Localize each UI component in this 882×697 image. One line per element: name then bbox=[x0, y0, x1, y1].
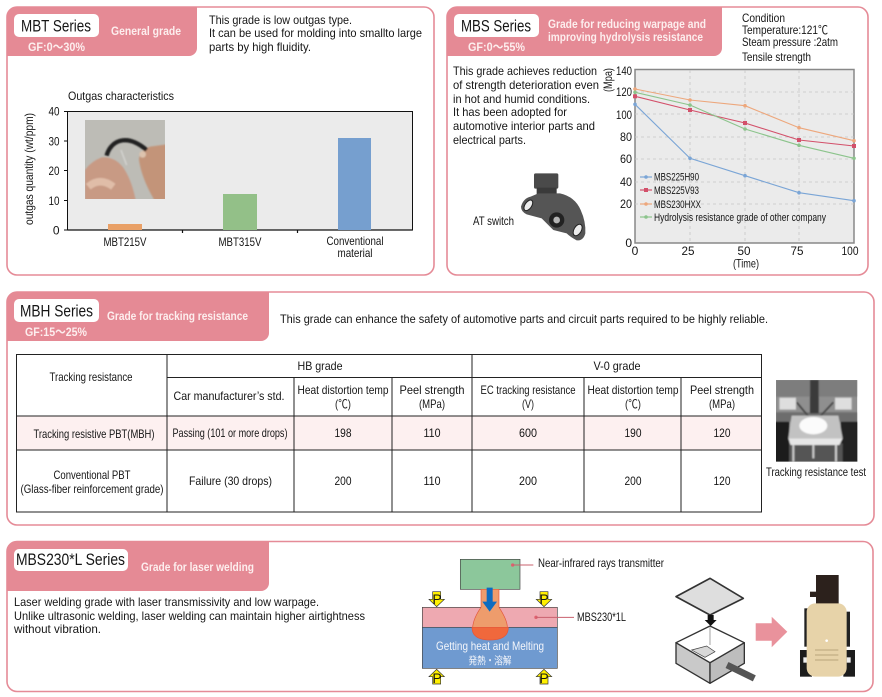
line chart: tensile strength: 0 bbox=[632, 244, 639, 258]
header: MBT Series: General grade bbox=[111, 24, 181, 38]
header: MBS Series: MBS Series bbox=[461, 18, 531, 36]
line chart: tensile strength: (Mpa) bbox=[601, 68, 615, 92]
diagram: laser welding: Getting heat and Melting bbox=[436, 639, 544, 653]
bar chart: outgas quantity: outgas quantity (wt/ppm) bbox=[22, 113, 36, 225]
table: tracking resistance comparison: 120 bbox=[714, 426, 731, 440]
line chart: tensile strength: 100 bbox=[842, 244, 859, 258]
table: tracking resistance comparison: 198 bbox=[334, 426, 352, 440]
text: MBS description bbox=[453, 64, 599, 147]
table: tracking resistance comparison bbox=[16, 354, 762, 512]
photo: tracking resistance test bbox=[773, 380, 859, 463]
table: tracking resistance comparison: 200 bbox=[519, 474, 537, 488]
bar chart: outgas quantity bbox=[22, 104, 412, 260]
label: AT switch: AT switch bbox=[473, 214, 514, 228]
text: MBT description: This grade is low outgas type. bbox=[209, 13, 352, 27]
line chart: tensile strength: 25 bbox=[682, 244, 695, 258]
bar chart: outgas quantity: MBT215V bbox=[104, 235, 146, 249]
bar chart: outgas quantity: 10 bbox=[48, 194, 60, 208]
table: tracking resistance comparison: (MPa) bbox=[419, 397, 445, 411]
header: MBS Series bbox=[447, 7, 722, 56]
diagram: laser welding: P bbox=[539, 670, 549, 686]
header: MBS230*L Series: MBS230*L Series bbox=[16, 551, 125, 569]
diagram: laser welding: P bbox=[432, 591, 442, 607]
icon: pressure arrows bbox=[429, 592, 552, 684]
line chart: tensile strength: 120 bbox=[616, 85, 632, 99]
header: MBT Series: MBT Series bbox=[21, 18, 91, 36]
line chart: tensile strength: 0 bbox=[625, 236, 632, 250]
table: tracking resistance comparison: HB grade bbox=[298, 359, 343, 373]
text: MBS description: of strength deterioration even bbox=[453, 78, 599, 92]
heading: outgas chart: Outgas characteristics bbox=[68, 89, 174, 103]
header: MBH Series: GF:15〜25% bbox=[25, 325, 87, 339]
table: tracking resistance comparison: (Glass-fiber reinforcement grade) bbox=[20, 482, 164, 496]
text: laser welding description bbox=[13, 595, 365, 636]
table: tracking resistance comparison: (℃) bbox=[625, 397, 641, 411]
icon: box with lid assembly bbox=[676, 578, 754, 683]
photo: welded sensor part bbox=[800, 575, 855, 677]
table: tracking resistance comparison: (V) bbox=[522, 397, 534, 411]
legend: MBS225H90 bbox=[654, 172, 699, 184]
text: test condition: Steam pressure :2atm bbox=[742, 35, 838, 49]
text: test condition: Temperature:121℃ bbox=[742, 23, 828, 37]
table: tracking resistance comparison: 200 bbox=[334, 474, 352, 488]
diagram: laser welding bbox=[422, 556, 664, 686]
panel: MBS Series bbox=[447, 7, 868, 275]
line chart: tensile strength bbox=[601, 64, 859, 270]
bar chart: outgas quantity: material bbox=[338, 246, 372, 260]
table: tracking resistance comparison: 120 bbox=[714, 474, 731, 488]
diagram: laser welding: MBS230*1L bbox=[577, 610, 626, 624]
arrow: pink block arrow bbox=[756, 617, 787, 647]
table: tracking resistance comparison: 110 bbox=[424, 474, 441, 488]
text: test condition: Condition bbox=[742, 11, 785, 25]
header: MBS Series: GF:0〜55% bbox=[468, 40, 525, 54]
diagram: laser welding: P bbox=[432, 670, 442, 686]
table: tracking resistance comparison: 190 bbox=[624, 426, 642, 440]
text: laser welding description: Unlike ultrasonic welding, laser welding can maintain higher airtightness bbox=[14, 609, 365, 623]
legend bbox=[640, 172, 826, 224]
header: MBT Series bbox=[7, 7, 197, 56]
table: tracking resistance comparison: Failure (30 drops) bbox=[189, 474, 272, 488]
legend: MBS230HXX bbox=[654, 199, 701, 211]
line chart: tensile strength: 140 bbox=[616, 64, 632, 78]
legend: Hydrolysis resistance grade of other company bbox=[654, 212, 826, 224]
table: tracking resistance comparison: 110 bbox=[424, 426, 441, 440]
diagram: laser welding: Near-infrared rays transmitter bbox=[538, 556, 664, 570]
header: MBS230*L Series: Grade for laser welding bbox=[141, 560, 254, 574]
table: tracking resistance comparison: Tracking resistance bbox=[50, 370, 133, 384]
table: tracking resistance comparison: 200 bbox=[624, 474, 642, 488]
header: MBH Series: Grade for tracking resistance bbox=[107, 309, 248, 323]
text: test condition bbox=[742, 11, 838, 64]
header: MBS Series: improving hydrolysis resistance bbox=[548, 30, 703, 44]
line chart: tensile strength: 60 bbox=[620, 152, 632, 166]
header: MBH Series bbox=[7, 292, 269, 341]
table: tracking resistance comparison: Car manufacturer’s std. bbox=[174, 389, 284, 403]
text: MBT description: parts by high fluidity. bbox=[209, 40, 311, 54]
table: tracking resistance comparison: Tracking resistive PBT(MBH) bbox=[34, 427, 154, 441]
table: tracking resistance comparison: (℃) bbox=[335, 397, 351, 411]
line chart: tensile strength: 100 bbox=[616, 108, 632, 122]
text: MBS description: automotive interior parts and bbox=[453, 119, 595, 133]
diagram: laser welding: 発熱・溶解 bbox=[468, 654, 512, 667]
line chart: tensile strength: 20 bbox=[620, 197, 632, 211]
table: tracking resistance comparison: Passing (101 or more drops) bbox=[172, 426, 288, 440]
diagram: laser welding: P bbox=[539, 591, 549, 607]
line chart: tensile strength: 40 bbox=[620, 175, 632, 189]
table: tracking resistance comparison: (MPa) bbox=[709, 397, 735, 411]
table: tracking resistance comparison: Heat distortion temp bbox=[298, 383, 389, 397]
text: laser welding description: without vibration. bbox=[13, 622, 101, 636]
text: MBS description: electrical parts. bbox=[453, 133, 526, 147]
text: test condition: Tensile strength bbox=[742, 50, 811, 64]
text: MBT description bbox=[209, 13, 422, 54]
table: tracking resistance comparison: Peel strength bbox=[400, 383, 464, 397]
bar chart: outgas quantity: 30 bbox=[48, 134, 60, 148]
bar chart: outgas quantity: 20 bbox=[48, 164, 60, 178]
table: tracking resistance comparison: 600 bbox=[519, 426, 537, 440]
line chart: tensile strength: (Time) bbox=[733, 256, 759, 270]
table: tracking resistance comparison: Heat distortion temp bbox=[588, 383, 679, 397]
panel: MBS230*L Series bbox=[7, 541, 873, 692]
text: MBH description: This grade can enhance the safety of automotive parts and circuit parts required to be highly reliable. bbox=[280, 312, 768, 326]
text: laser welding description: Laser welding grade with laser transmissivity and low warpage. bbox=[14, 595, 319, 609]
header: MBH Series: MBH Series bbox=[20, 302, 93, 320]
table: tracking resistance comparison: EC tracking resistance bbox=[480, 383, 576, 397]
icon: AT switch part bbox=[521, 173, 585, 240]
table: tracking resistance comparison: Peel strength bbox=[690, 383, 754, 397]
header: MBT Series: GF:0〜30% bbox=[28, 40, 85, 54]
header: MBS Series: Grade for reducing warpage and bbox=[548, 17, 706, 31]
line chart: tensile strength: 80 bbox=[620, 130, 632, 144]
header: MBS230*L Series bbox=[7, 541, 269, 591]
bar chart: outgas quantity: 40 bbox=[48, 104, 60, 118]
bar chart: outgas quantity: MBT315V bbox=[218, 235, 262, 249]
line chart: tensile strength: 75 bbox=[790, 244, 804, 258]
line chart: tensile strength: 50 bbox=[738, 244, 751, 258]
table: tracking resistance comparison: V-0 grade bbox=[594, 359, 641, 373]
photo: hands bending part bbox=[85, 120, 167, 200]
bar chart: outgas quantity: Conventional bbox=[326, 234, 384, 248]
text: MBS description: This grade achieves reduction bbox=[453, 64, 597, 78]
panel: MBT Series bbox=[7, 7, 434, 275]
text: MBT description: It can be used for molding into smallto large bbox=[209, 26, 422, 40]
panel: MBH Series bbox=[7, 292, 874, 525]
bar chart: outgas quantity: 0 bbox=[53, 224, 60, 238]
table: tracking resistance comparison: Conventional PBT bbox=[54, 468, 131, 482]
text: MBS description: in hot and humid conditions. bbox=[453, 92, 590, 106]
text: MBS description: It has been adopted for bbox=[453, 105, 567, 119]
legend: MBS225V93 bbox=[654, 185, 699, 197]
